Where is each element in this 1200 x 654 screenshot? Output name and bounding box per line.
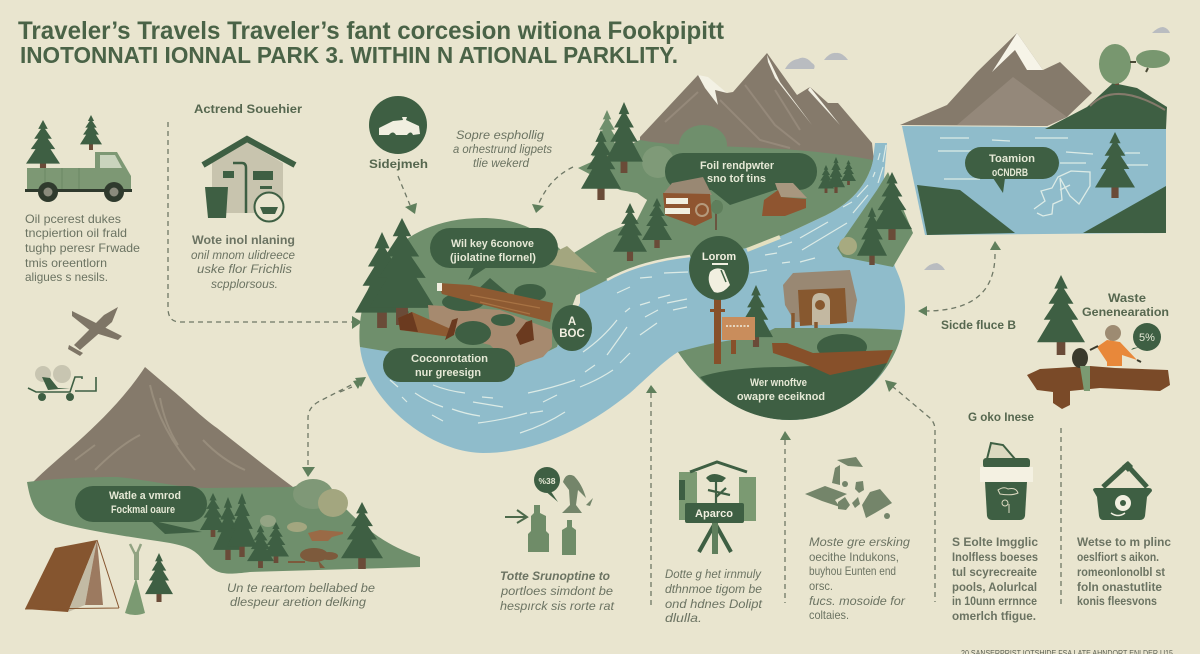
text block: column three: oecithe Indukons, bbox=[809, 550, 899, 564]
illustration: white scribble marks bbox=[1034, 171, 1090, 216]
icon: tripod station bbox=[679, 462, 756, 554]
icon: clouds bbox=[785, 27, 1170, 270]
illustration: hilltop trees bbox=[1099, 44, 1170, 85]
panel: basket column bbox=[1077, 461, 1171, 608]
text block: column three: orsc. bbox=[809, 579, 833, 593]
text block: column three: Moste gre ersking bbox=[809, 535, 910, 549]
icon: tent bbox=[25, 540, 119, 612]
text block: basket description: foln onastutlite bbox=[1077, 580, 1162, 594]
panel: upper riverside land bbox=[567, 125, 873, 296]
icon: small pine bbox=[145, 553, 173, 602]
bubble: concentration bbox=[383, 348, 515, 382]
text block: basket description: konis fleesvons bbox=[1077, 594, 1157, 608]
river ripples bbox=[390, 145, 886, 433]
panel: truck and transport bbox=[25, 115, 140, 284]
icon: plant and chat bubble: %38 bbox=[538, 476, 556, 486]
arrow: badge to forest bbox=[398, 176, 417, 214]
text block: cup description: S Eolte Imgglic bbox=[952, 535, 1038, 549]
illustration: snowcapped mountain bbox=[900, 33, 1092, 126]
text block: waste handling bbox=[191, 233, 295, 291]
panel: bottom column two bbox=[665, 462, 763, 625]
title bbox=[18, 17, 725, 68]
text block: column one: portloes simdont be bbox=[500, 584, 613, 598]
text block: truck description: tmis oreentlorn bbox=[25, 256, 107, 270]
bubble: concentration: nur greesign bbox=[415, 367, 481, 379]
heading: accommodation: Actrend Souehier bbox=[194, 102, 302, 116]
arrow: cup column to lobe bbox=[885, 380, 935, 602]
label: side fluce: Sicde fluce B bbox=[941, 318, 1016, 332]
heading: cup: G oko Inese bbox=[968, 410, 1034, 424]
arrow: lake to lobe bbox=[918, 241, 1001, 316]
panel: accommodation bbox=[168, 102, 362, 329]
icon: reusable cup bbox=[980, 443, 1033, 520]
text block: cup description: omerlch tfigue. bbox=[952, 609, 1036, 623]
text block: truck description: Oil pcerest dukes bbox=[25, 212, 121, 226]
panel: waste generation hiker bbox=[1027, 275, 1170, 409]
bubble: valley caption bbox=[75, 486, 207, 534]
caption: foreground: Wer wnoftve bbox=[750, 377, 807, 389]
text block: column three bbox=[809, 535, 910, 622]
water lines bbox=[938, 138, 1148, 179]
illustration: tall pines bbox=[355, 218, 435, 328]
illustration: wooden sign bbox=[722, 317, 755, 354]
text block: scenic note: Sopre esphollig bbox=[456, 128, 544, 142]
panel: bottom column one bbox=[500, 467, 615, 613]
illustration: stone hut bbox=[783, 270, 857, 336]
text block: column one: hespırck sis rorte rat bbox=[500, 599, 615, 613]
icon: stone fragments bbox=[805, 457, 892, 519]
text block: scenic note bbox=[453, 128, 552, 170]
illustration: second cabin bbox=[762, 183, 807, 216]
bubble: key concern: (jiolatine flornel) bbox=[450, 252, 536, 264]
illustration: riverside pine bbox=[739, 285, 773, 347]
text block: column two bbox=[665, 567, 763, 625]
text block: truck description: tughp peresr Frwade bbox=[25, 241, 140, 255]
text block: truck description: aligues s nesils. bbox=[25, 270, 108, 284]
illustration: shrubs bbox=[260, 479, 348, 532]
panel: river bbox=[360, 143, 905, 453]
bubble: lake caption: Toamion bbox=[989, 153, 1035, 165]
text block: column two: dthnmoe tigom be bbox=[665, 582, 762, 596]
badge: Lorom bbox=[689, 236, 749, 300]
bubble: lake caption: oCNDRB bbox=[992, 167, 1028, 179]
arrow: column one to river bbox=[646, 385, 657, 605]
illustration: logging clearing bbox=[428, 305, 552, 367]
shrubs bbox=[642, 125, 727, 178]
badge: A BOC bbox=[552, 305, 592, 351]
panel: lake scene bbox=[900, 33, 1170, 235]
text block: cup description: pools, Aolurlcal bbox=[952, 580, 1037, 594]
illustration: dirt trail bbox=[772, 343, 893, 375]
illustration: log seat bbox=[1027, 366, 1170, 409]
icon: wild animals bbox=[288, 530, 343, 568]
text block: truck description: tncpiertion oil frald bbox=[25, 226, 127, 240]
bubble: percent bbox=[1131, 323, 1161, 351]
text block: basket description: romeonlonolbl st bbox=[1077, 565, 1165, 579]
panel: upper-right wooded bank bbox=[837, 172, 913, 267]
illustration: valley forest bbox=[200, 493, 383, 569]
icon: plant and chat bubble bbox=[534, 467, 593, 513]
text block: basket description: oeslfiort s aikon. bbox=[1077, 550, 1159, 564]
arrow: note to forest bbox=[532, 167, 573, 213]
text block: cup description bbox=[952, 535, 1038, 623]
panel: central mountain bbox=[640, 53, 875, 200]
illustration: felled logs bbox=[398, 283, 553, 345]
icon: truck bbox=[25, 152, 132, 202]
icon: airplane bbox=[68, 307, 122, 356]
text block: waste handling: Wote inol nlaning bbox=[192, 233, 295, 247]
text block: column one: Totte Srunoptine to bbox=[500, 569, 610, 583]
bubble: valley caption: Watle a vmrod bbox=[109, 490, 181, 502]
text block: column two: ond hdnes Dolipt bbox=[665, 597, 763, 611]
text block: truck description bbox=[25, 212, 140, 284]
arrow: valley to river bbox=[302, 377, 366, 477]
text block: cup description: in 10unn errnnce bbox=[952, 594, 1037, 608]
icon: arrow and towers bbox=[505, 505, 576, 555]
caption: foreground: owapre eceiknod bbox=[737, 391, 825, 403]
icon: vehicle badge bbox=[369, 96, 427, 154]
text block: basket description bbox=[1077, 535, 1171, 608]
icon: pine trees bbox=[26, 115, 102, 172]
illustration: rocky mountain bbox=[33, 367, 293, 495]
heading: waste generation: Genenearation bbox=[1082, 305, 1169, 319]
text block: cup description: tul scyrecreaite bbox=[952, 565, 1037, 579]
icon: off-road vehicle with smoke bbox=[28, 365, 96, 401]
badge: A BOC: A bbox=[568, 316, 576, 328]
bubble: lodging caption: Foil rendpwter bbox=[700, 160, 775, 172]
bubble: key concern bbox=[430, 228, 558, 280]
panel: bottom column three bbox=[805, 457, 910, 622]
icon: forest cluster bbox=[581, 102, 856, 261]
text block: column three: fucs. mosoide for bbox=[809, 594, 906, 608]
text block: waste handling: uske flor Frichlis bbox=[197, 262, 292, 276]
text block: waste handling: onil mnom ulidreece bbox=[191, 248, 295, 262]
text block: column three: coltaies. bbox=[809, 608, 849, 622]
text block: cup description: Inolfless boeses bbox=[952, 550, 1038, 564]
text block: valley note bbox=[227, 581, 375, 609]
text block: column two: dlulla. bbox=[665, 611, 702, 625]
panel: left forest blob bbox=[355, 218, 597, 382]
badge: Lorom: Lorom bbox=[702, 251, 736, 263]
text block: scenic note: a orhestrund ligpets bbox=[453, 142, 552, 156]
bubble: lake caption bbox=[965, 147, 1059, 193]
icon: basket bbox=[1093, 461, 1152, 520]
icon: house with bin bbox=[203, 139, 295, 222]
panel: cup column bbox=[952, 410, 1038, 623]
text block: column three: buyhou Eunten end bbox=[809, 564, 896, 578]
icon: green pack bbox=[125, 544, 145, 615]
illustration: lake water bbox=[902, 126, 1166, 235]
bubble: lodging caption: sno tof tins bbox=[707, 173, 766, 185]
illustration: bush bbox=[817, 334, 867, 360]
heading: waste generation bbox=[1082, 291, 1169, 319]
illustration: dark foreground band bbox=[700, 363, 887, 420]
illustration: seated hiker bbox=[1072, 325, 1141, 393]
text block: basket description: Wetse to m plinc bbox=[1077, 535, 1171, 549]
illustration: green valley bbox=[27, 477, 420, 574]
illustration: grassy bank bbox=[678, 328, 902, 420]
heading: waste generation: Waste bbox=[1108, 291, 1146, 305]
illustration: lakeside pine bbox=[1095, 132, 1135, 198]
panel: right river lobe bbox=[678, 236, 902, 420]
icon: tripod station: Aparco bbox=[695, 508, 733, 520]
text block: scenic note: tlie wekerd bbox=[473, 156, 529, 170]
arrow: accommodation to forest bbox=[168, 122, 362, 329]
text block: column one bbox=[500, 569, 615, 613]
illustration: dark hill bbox=[1045, 83, 1167, 129]
panel: mountain and wildlife valley bbox=[27, 367, 420, 574]
title: INOTONNATI IONNAL PARK 3. WITHIN N ATIONAL PARKLITY. bbox=[20, 42, 678, 68]
bubble: key concern: Wil key 6conove bbox=[451, 238, 534, 250]
illustration: pine bbox=[1037, 275, 1085, 355]
illustration: tan meadow patch bbox=[535, 246, 597, 273]
bubble: lodging caption bbox=[665, 153, 817, 205]
bubble: concentration: Coconrotation bbox=[411, 353, 488, 365]
caption: foreground bbox=[737, 377, 825, 403]
text block: column two: Dotte g het irnmuly bbox=[665, 567, 762, 581]
illustration: log cabin bbox=[663, 177, 723, 230]
text block: valley note: dlespeur aretion delking bbox=[230, 595, 366, 609]
bubble: percent: 5% bbox=[1139, 332, 1155, 344]
illustration: lake banks bbox=[917, 185, 1166, 235]
illustration: bushes bbox=[442, 278, 546, 345]
text block: valley note: Un te reartom bellabed be bbox=[227, 581, 375, 595]
text block: waste handling: scpplorsous. bbox=[211, 277, 278, 291]
arrow: left into blob bbox=[340, 379, 363, 392]
bubble: valley caption: Fockmal oaure bbox=[111, 504, 175, 516]
badge: A BOC: BOC bbox=[559, 328, 585, 340]
label: vehicle badge: Sidejmeh bbox=[369, 157, 428, 171]
title: Traveler’s Travels Traveler’s fant corcesion witiona Fookpipitt bbox=[18, 17, 725, 45]
illustration: signpost bbox=[710, 298, 725, 364]
arrow: column two to lobe bbox=[780, 431, 791, 603]
